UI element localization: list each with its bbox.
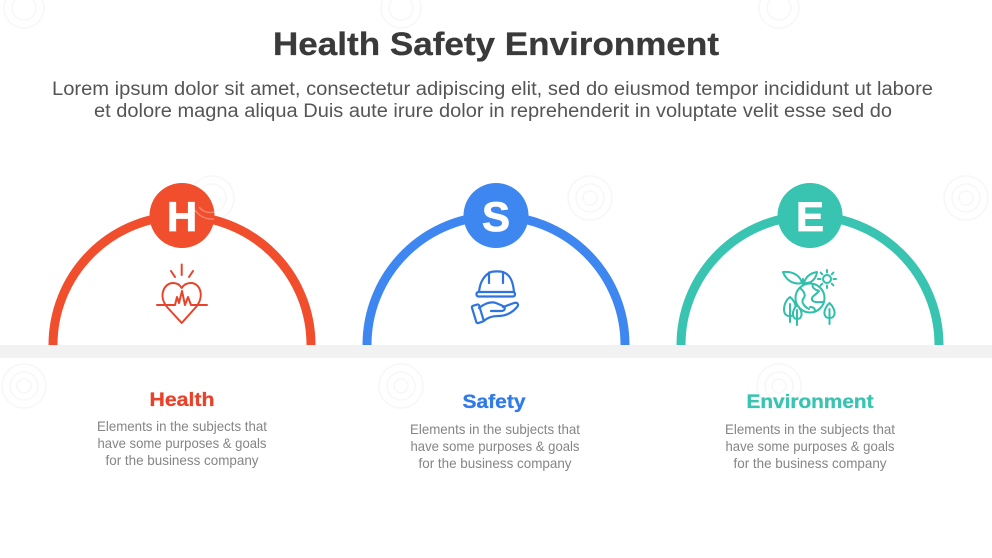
environment description: for the business company [734, 455, 886, 471]
environment badge: E [796, 193, 824, 240]
environment description: have some purposes & goals [726, 438, 894, 454]
title: Health Safety Environment [273, 26, 719, 62]
health description [97, 418, 267, 468]
subtitle text: Lorem ipsum dolor sit amet, consectetur adipiscing elit, sed do eiusmod tempor incididunt ut labore [52, 79, 933, 100]
health description: for the business company [106, 452, 258, 468]
health description: Elements in the subjects that [97, 418, 267, 434]
environment description [725, 421, 895, 471]
health description: have some purposes & goals [98, 435, 266, 451]
safety description: Elements in the subjects that [410, 421, 580, 437]
panel: safety [367, 183, 625, 471]
horizontal divider band [0, 345, 992, 358]
icon: heart with pulse [157, 264, 207, 323]
health badge: H [167, 193, 197, 240]
safety arc [367, 216, 625, 345]
environment badge [778, 183, 842, 248]
panel: environment [681, 183, 939, 471]
icon: helmet in hand [471, 271, 518, 323]
safety badge [464, 183, 528, 248]
safety badge: S [482, 193, 510, 240]
health arc [53, 216, 311, 345]
icon: globe with leaves and sun [783, 270, 836, 325]
environment heading: Environment [746, 392, 874, 413]
safety description: have some purposes & goals [410, 438, 580, 454]
subtitle text [52, 79, 933, 122]
panel: health [53, 183, 311, 468]
environment arc [681, 216, 939, 345]
safety heading: Safety [462, 392, 526, 413]
environment description: Elements in the subjects that [725, 421, 895, 437]
health badge [150, 183, 214, 248]
subtitle text: et dolore magna aliqua Duis aute irure dolor in reprehenderit in voluptate velit esse sed do [94, 101, 892, 122]
health heading: Health [150, 390, 214, 411]
safety description: for the business company [418, 455, 572, 471]
safety description [410, 421, 580, 471]
